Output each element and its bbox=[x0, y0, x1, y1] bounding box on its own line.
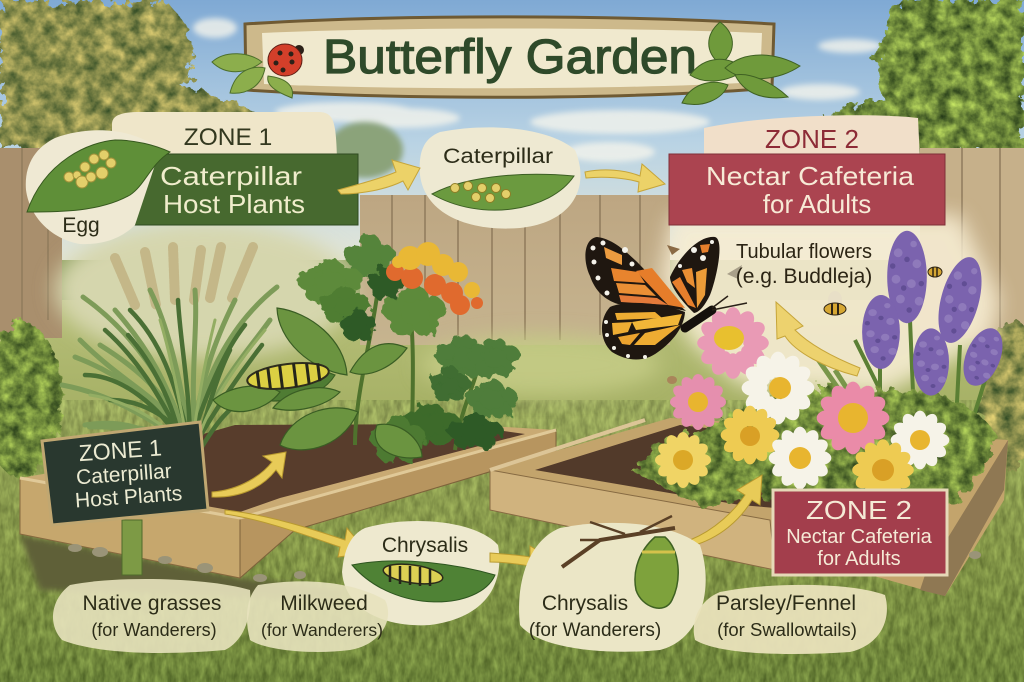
arrow: sign to caterpillar bbox=[212, 452, 286, 497]
tubular flowers note bbox=[736, 241, 872, 288]
parsley fennel label: Parsley/Fennel bbox=[716, 592, 856, 615]
zone 1 chalkboard sign bbox=[42, 422, 208, 575]
background: lawn bbox=[0, 300, 1024, 682]
chrysalis twig panel: Chrysalis bbox=[542, 592, 628, 615]
flowers: daisies bbox=[655, 307, 949, 501]
bees and moths bbox=[667, 245, 942, 384]
chrysalis twig panel: (for Wanderers) bbox=[529, 620, 661, 641]
icon: leaf with eggs bbox=[432, 174, 574, 210]
ground shadow under beds bbox=[20, 535, 345, 600]
icon: left leaves bbox=[212, 54, 293, 98]
icon: caterpillar on leaf bbox=[352, 561, 495, 602]
body bbox=[685, 310, 712, 328]
arrow: chrysalis to twig bbox=[490, 546, 556, 576]
lawn texture bbox=[0, 400, 1024, 682]
arrow: caterpillar to zone 2 bbox=[585, 164, 665, 192]
milkweed label: Milkweed bbox=[280, 592, 368, 615]
left forewing bbox=[585, 237, 686, 311]
foliage side right bbox=[980, 320, 1024, 470]
title banner: Butterfly Garden bbox=[323, 31, 697, 84]
zone 1 heading tab: ZONE 1 bbox=[184, 124, 272, 151]
icon: twig bbox=[562, 528, 675, 567]
flower cluster bbox=[386, 242, 483, 315]
background: trees left bbox=[0, 0, 403, 178]
chrysalis panel (centre): Chrysalis bbox=[382, 534, 468, 557]
plant: grasses bbox=[62, 247, 277, 450]
butterfly bbox=[585, 237, 747, 360]
native grasses label bbox=[53, 579, 250, 653]
zone 1 chalkboard sign: Caterpillar bbox=[75, 460, 173, 489]
chrysalis twig panel bbox=[519, 516, 706, 652]
zone 1 sign: caterpillar host plants: Caterpillar bbox=[160, 161, 302, 191]
zone 2 sign: nectar cafeteria: for Adults bbox=[763, 189, 871, 219]
title banner bbox=[212, 17, 800, 104]
milkweed leaves bbox=[213, 308, 422, 458]
raised bed: right bbox=[490, 418, 1008, 596]
hindwing bbox=[602, 303, 685, 360]
background mist around planting bbox=[55, 222, 660, 395]
zone 2 heading tab bbox=[704, 115, 920, 160]
right forewing bbox=[670, 237, 719, 313]
parsley fennel label bbox=[694, 585, 887, 654]
egg panel bbox=[26, 130, 170, 244]
zone 1 chalkboard sign: ZONE 1 bbox=[78, 434, 163, 466]
arrow: zone 1 to caterpillar bbox=[338, 160, 420, 194]
chrysalis panel (centre) bbox=[342, 521, 499, 625]
icon: egg leaf bbox=[27, 140, 170, 212]
parsley fennel label: (for Swallowtails) bbox=[717, 619, 857, 640]
zone 2 cream backdrop bbox=[660, 215, 1000, 395]
foliage side left bbox=[0, 322, 62, 478]
native grasses label: Native grasses bbox=[83, 592, 221, 615]
parsley leaves bbox=[296, 234, 521, 462]
stones along bed bbox=[68, 544, 981, 582]
zone 2 wooden sign: Nectar Cafeteria bbox=[786, 526, 933, 548]
raised bed: left bbox=[20, 424, 556, 578]
tubular flowers note: Tubular flowers bbox=[736, 241, 872, 263]
zone 2 wooden sign bbox=[773, 490, 947, 575]
caterpillar on leaf bbox=[246, 359, 330, 393]
zone 1 sign: caterpillar host plants bbox=[125, 154, 358, 225]
zone 1 sign: caterpillar host plants: Host Plants bbox=[163, 189, 305, 219]
plant: parsley, milkweed and flower cluster bbox=[213, 234, 521, 462]
flowers: lavender spikes bbox=[862, 231, 1010, 396]
zone 2 wooden sign: ZONE 2 bbox=[806, 495, 912, 525]
native grasses label: (for Wanderers) bbox=[91, 620, 217, 640]
arrow: flowers to butterfly bbox=[776, 302, 860, 376]
arrow: chrysalis to zone 2 sign bbox=[690, 475, 762, 546]
tubular flowers note: (e.g. Buddleja) bbox=[736, 265, 872, 288]
arrow: sign to chrysalis bbox=[225, 510, 368, 557]
background: sky bbox=[0, 0, 1024, 260]
flowers: foliage bbox=[630, 320, 1000, 510]
zone 2 wooden sign: for Adults bbox=[817, 548, 901, 570]
wooden fence bbox=[0, 148, 1024, 345]
background: clouds bbox=[193, 18, 882, 162]
background: trees right bbox=[800, 0, 1024, 152]
milkweed label: (for Wanderers) bbox=[261, 620, 383, 640]
caterpillar panel: Caterpillar bbox=[443, 145, 553, 168]
caterpillar panel bbox=[420, 127, 580, 229]
milkweed label bbox=[247, 581, 388, 652]
zone 2 sign: nectar cafeteria: Nectar Cafeteria bbox=[706, 161, 915, 191]
icon: chrysalis bbox=[635, 537, 678, 608]
zone 1 chalkboard sign: Host Plants bbox=[74, 482, 183, 513]
zone 2 heading tab: ZONE 2 bbox=[765, 124, 859, 154]
egg panel: Egg bbox=[62, 214, 100, 237]
icon: ladybug bbox=[268, 44, 304, 76]
icon: right leaves bbox=[682, 22, 800, 104]
zone 2 sign: nectar cafeteria bbox=[669, 154, 945, 225]
zone 1 heading tab bbox=[112, 112, 337, 160]
